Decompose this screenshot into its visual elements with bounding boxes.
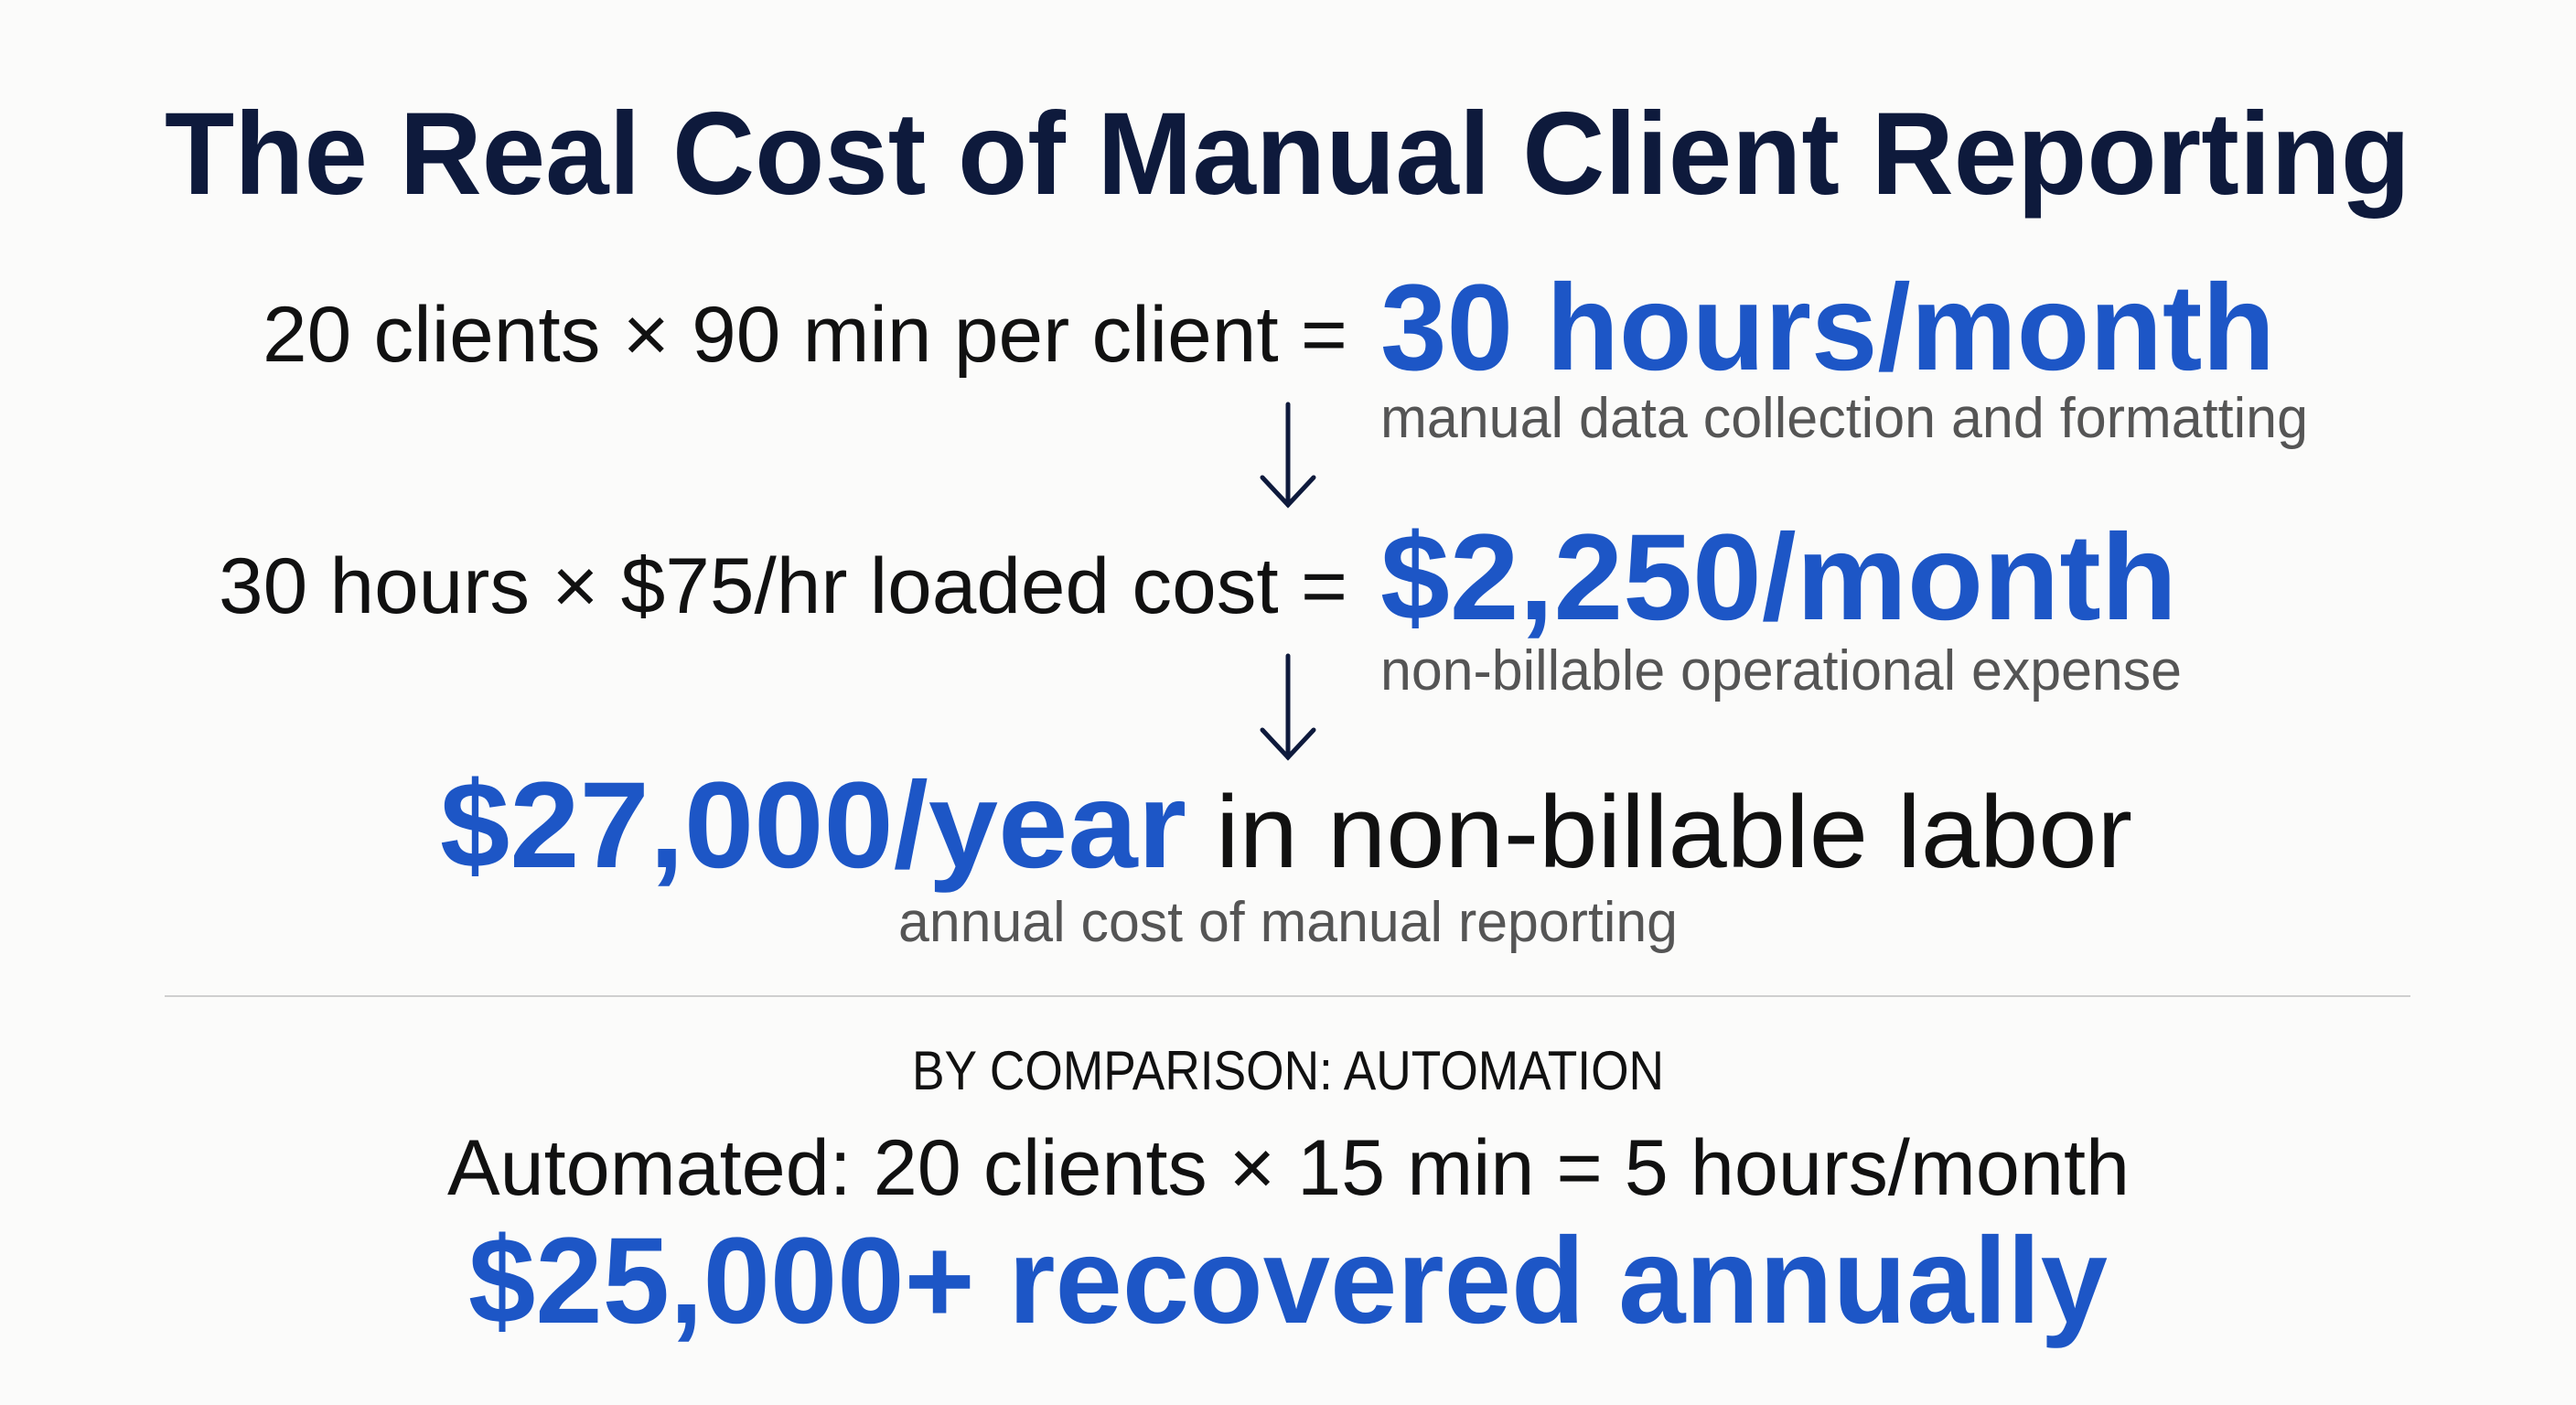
step 2: cost calculation bbox=[219, 509, 2182, 702]
step 2 caption: non-billable operational expense bbox=[1380, 639, 2182, 702]
title: The Real Cost of Manual Client Reporting bbox=[165, 89, 2410, 220]
step 2 result: $2,250/month bbox=[1380, 509, 2177, 646]
comparison heading: BY COMPARISON: AUTOMATION bbox=[912, 1040, 1664, 1101]
automated formula: Automated: 20 clients × 15 min = 5 hours/month bbox=[447, 1124, 2130, 1212]
arrow 1 bbox=[1262, 404, 1314, 505]
step 1 result: 30 hours/month bbox=[1380, 260, 2275, 396]
arrow 2 bbox=[1262, 656, 1314, 757]
annual label: in non-billable labor bbox=[1216, 775, 2132, 889]
step 1 caption: manual data collection and formatting bbox=[1380, 387, 2308, 450]
step 2 formula: 30 hours × $75/hr loaded cost = bbox=[219, 542, 1347, 630]
comparison section bbox=[447, 1040, 2130, 1349]
step 1: hours calculation bbox=[263, 260, 2308, 450]
annual caption: annual cost of manual reporting bbox=[898, 891, 1678, 954]
annual total bbox=[440, 757, 2132, 954]
step 1 formula: 20 clients × 90 min per client = bbox=[263, 291, 1347, 379]
annual amount: $27,000/year bbox=[440, 757, 1186, 894]
savings headline: $25,000+ recovered annually bbox=[468, 1213, 2108, 1349]
